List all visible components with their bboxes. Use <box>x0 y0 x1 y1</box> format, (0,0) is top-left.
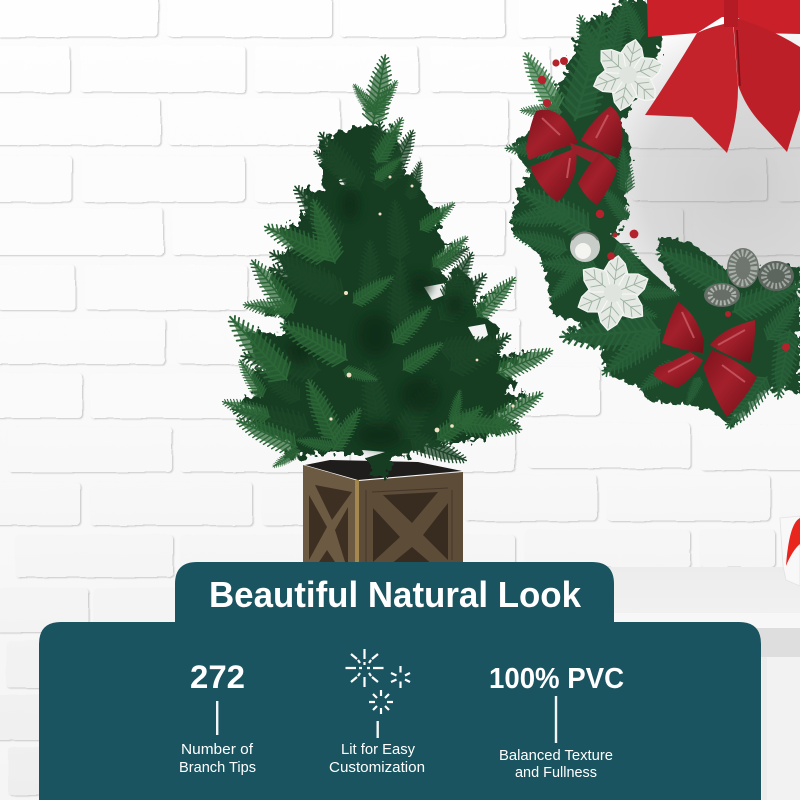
deep foliage shadows <box>286 189 465 449</box>
stat number: 272 <box>190 659 245 695</box>
heading: Beautiful Natural Look <box>209 574 582 615</box>
stat description: Number of <box>181 741 254 758</box>
stat description <box>179 741 256 776</box>
pine cones <box>704 248 794 307</box>
dark red bow lower <box>653 302 757 417</box>
stat description: Balanced Texture <box>499 747 613 764</box>
gaps in foliage <box>339 177 488 458</box>
connector line <box>376 721 379 738</box>
stat description: Lit for Easy <box>341 741 415 758</box>
stat number: 100% PVC <box>489 663 624 695</box>
panel: feature card <box>39 562 761 800</box>
wreath <box>505 0 800 435</box>
large red glitter bow <box>645 0 800 153</box>
tree silhouette <box>236 124 538 477</box>
white snowflake ornament upper <box>584 32 672 118</box>
icon: sparkles <box>346 649 410 714</box>
dark branches <box>229 119 521 471</box>
stat description <box>499 747 613 781</box>
highlighted branches <box>219 53 557 472</box>
white snowflake ornament lower <box>569 250 657 336</box>
stat description: Branch Tips <box>179 759 256 776</box>
dark red bow upper <box>526 106 622 205</box>
panel background with heading tab <box>39 562 761 800</box>
connector line <box>216 701 218 735</box>
silver bauble <box>570 232 600 262</box>
connector line <box>555 696 557 743</box>
stat description <box>329 741 425 776</box>
stat description: Customization <box>329 759 425 776</box>
potted christmas tree <box>219 53 557 565</box>
mantel shelf <box>600 567 800 800</box>
stat: 100% PVC <box>489 663 624 781</box>
wreath foliage <box>505 0 800 435</box>
stat description: and Fullness <box>515 764 597 781</box>
stat: lit for easy customization <box>329 649 425 776</box>
stat: branch tips <box>179 659 256 776</box>
fairy lights <box>329 176 515 432</box>
gift box at right edge <box>780 516 800 586</box>
red berries <box>538 57 790 351</box>
wooden crate planter <box>303 460 463 565</box>
